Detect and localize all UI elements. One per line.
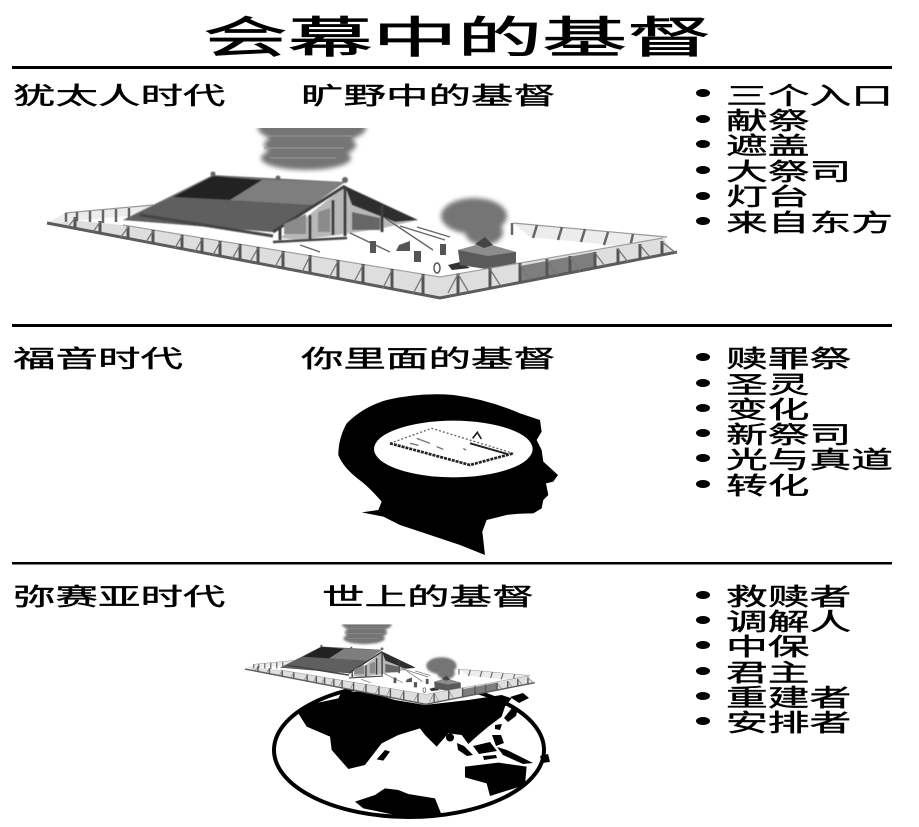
bullet list [696, 346, 893, 500]
panel: Gospel era [13, 346, 893, 555]
bullet list [696, 584, 851, 737]
title: 会幕中的基督 [203, 14, 712, 63]
bullet list: 圣灵 [726, 372, 810, 399]
Asian islands [446, 693, 550, 764]
panel heading: 旷野中的基督 [301, 83, 556, 110]
bullet list: 赎罪祭 [726, 346, 851, 373]
bullet list: 救赎者 [726, 584, 851, 611]
era heading: 弥赛亚时代 [13, 584, 225, 611]
panel: Messianic era [13, 584, 851, 817]
icon: globe [274, 683, 550, 817]
tent smoke [258, 112, 366, 170]
bullet list: 重建者 [726, 685, 851, 712]
panel: Jewish era [13, 83, 893, 298]
courtyard ropes and furnishings [300, 218, 450, 252]
bullet list: 光与真道 [726, 447, 893, 474]
bullet list: 遮盖 [726, 133, 810, 160]
bullet list: 安排者 [726, 710, 851, 737]
altar smoke [441, 198, 507, 245]
bullet list: 调解人 [726, 609, 851, 636]
bullet list [696, 83, 893, 237]
bullet list: 大祭司 [726, 159, 851, 186]
bullet list: 转化 [726, 473, 810, 500]
illustration: small tabernacle above the globe [245, 617, 535, 704]
era heading: 福音时代 [13, 346, 183, 373]
altar [448, 237, 516, 270]
bullet list: 献祭 [726, 108, 810, 135]
bullet list: 中保 [726, 634, 810, 661]
bullet list: 三个入口 [726, 83, 893, 110]
courtyard floor [47, 190, 677, 298]
courtyard fence [47, 217, 677, 298]
tent roof [123, 172, 418, 242]
bullet list: 变化 [726, 397, 810, 424]
bullet list: 灯台 [726, 184, 810, 211]
bullet list: 新祭司 [726, 422, 851, 449]
icon: head silhouette with tabernacle [338, 394, 558, 555]
far fences [47, 205, 667, 250]
bullet list: 君主 [726, 660, 810, 687]
illustration: tabernacle courtyard [47, 112, 677, 298]
era heading: 犹太人时代 [13, 83, 225, 110]
bullet list: 来自东方 [726, 210, 893, 237]
panel heading: 你里面的基督 [301, 346, 556, 373]
panel heading: 世上的基督 [322, 584, 534, 611]
